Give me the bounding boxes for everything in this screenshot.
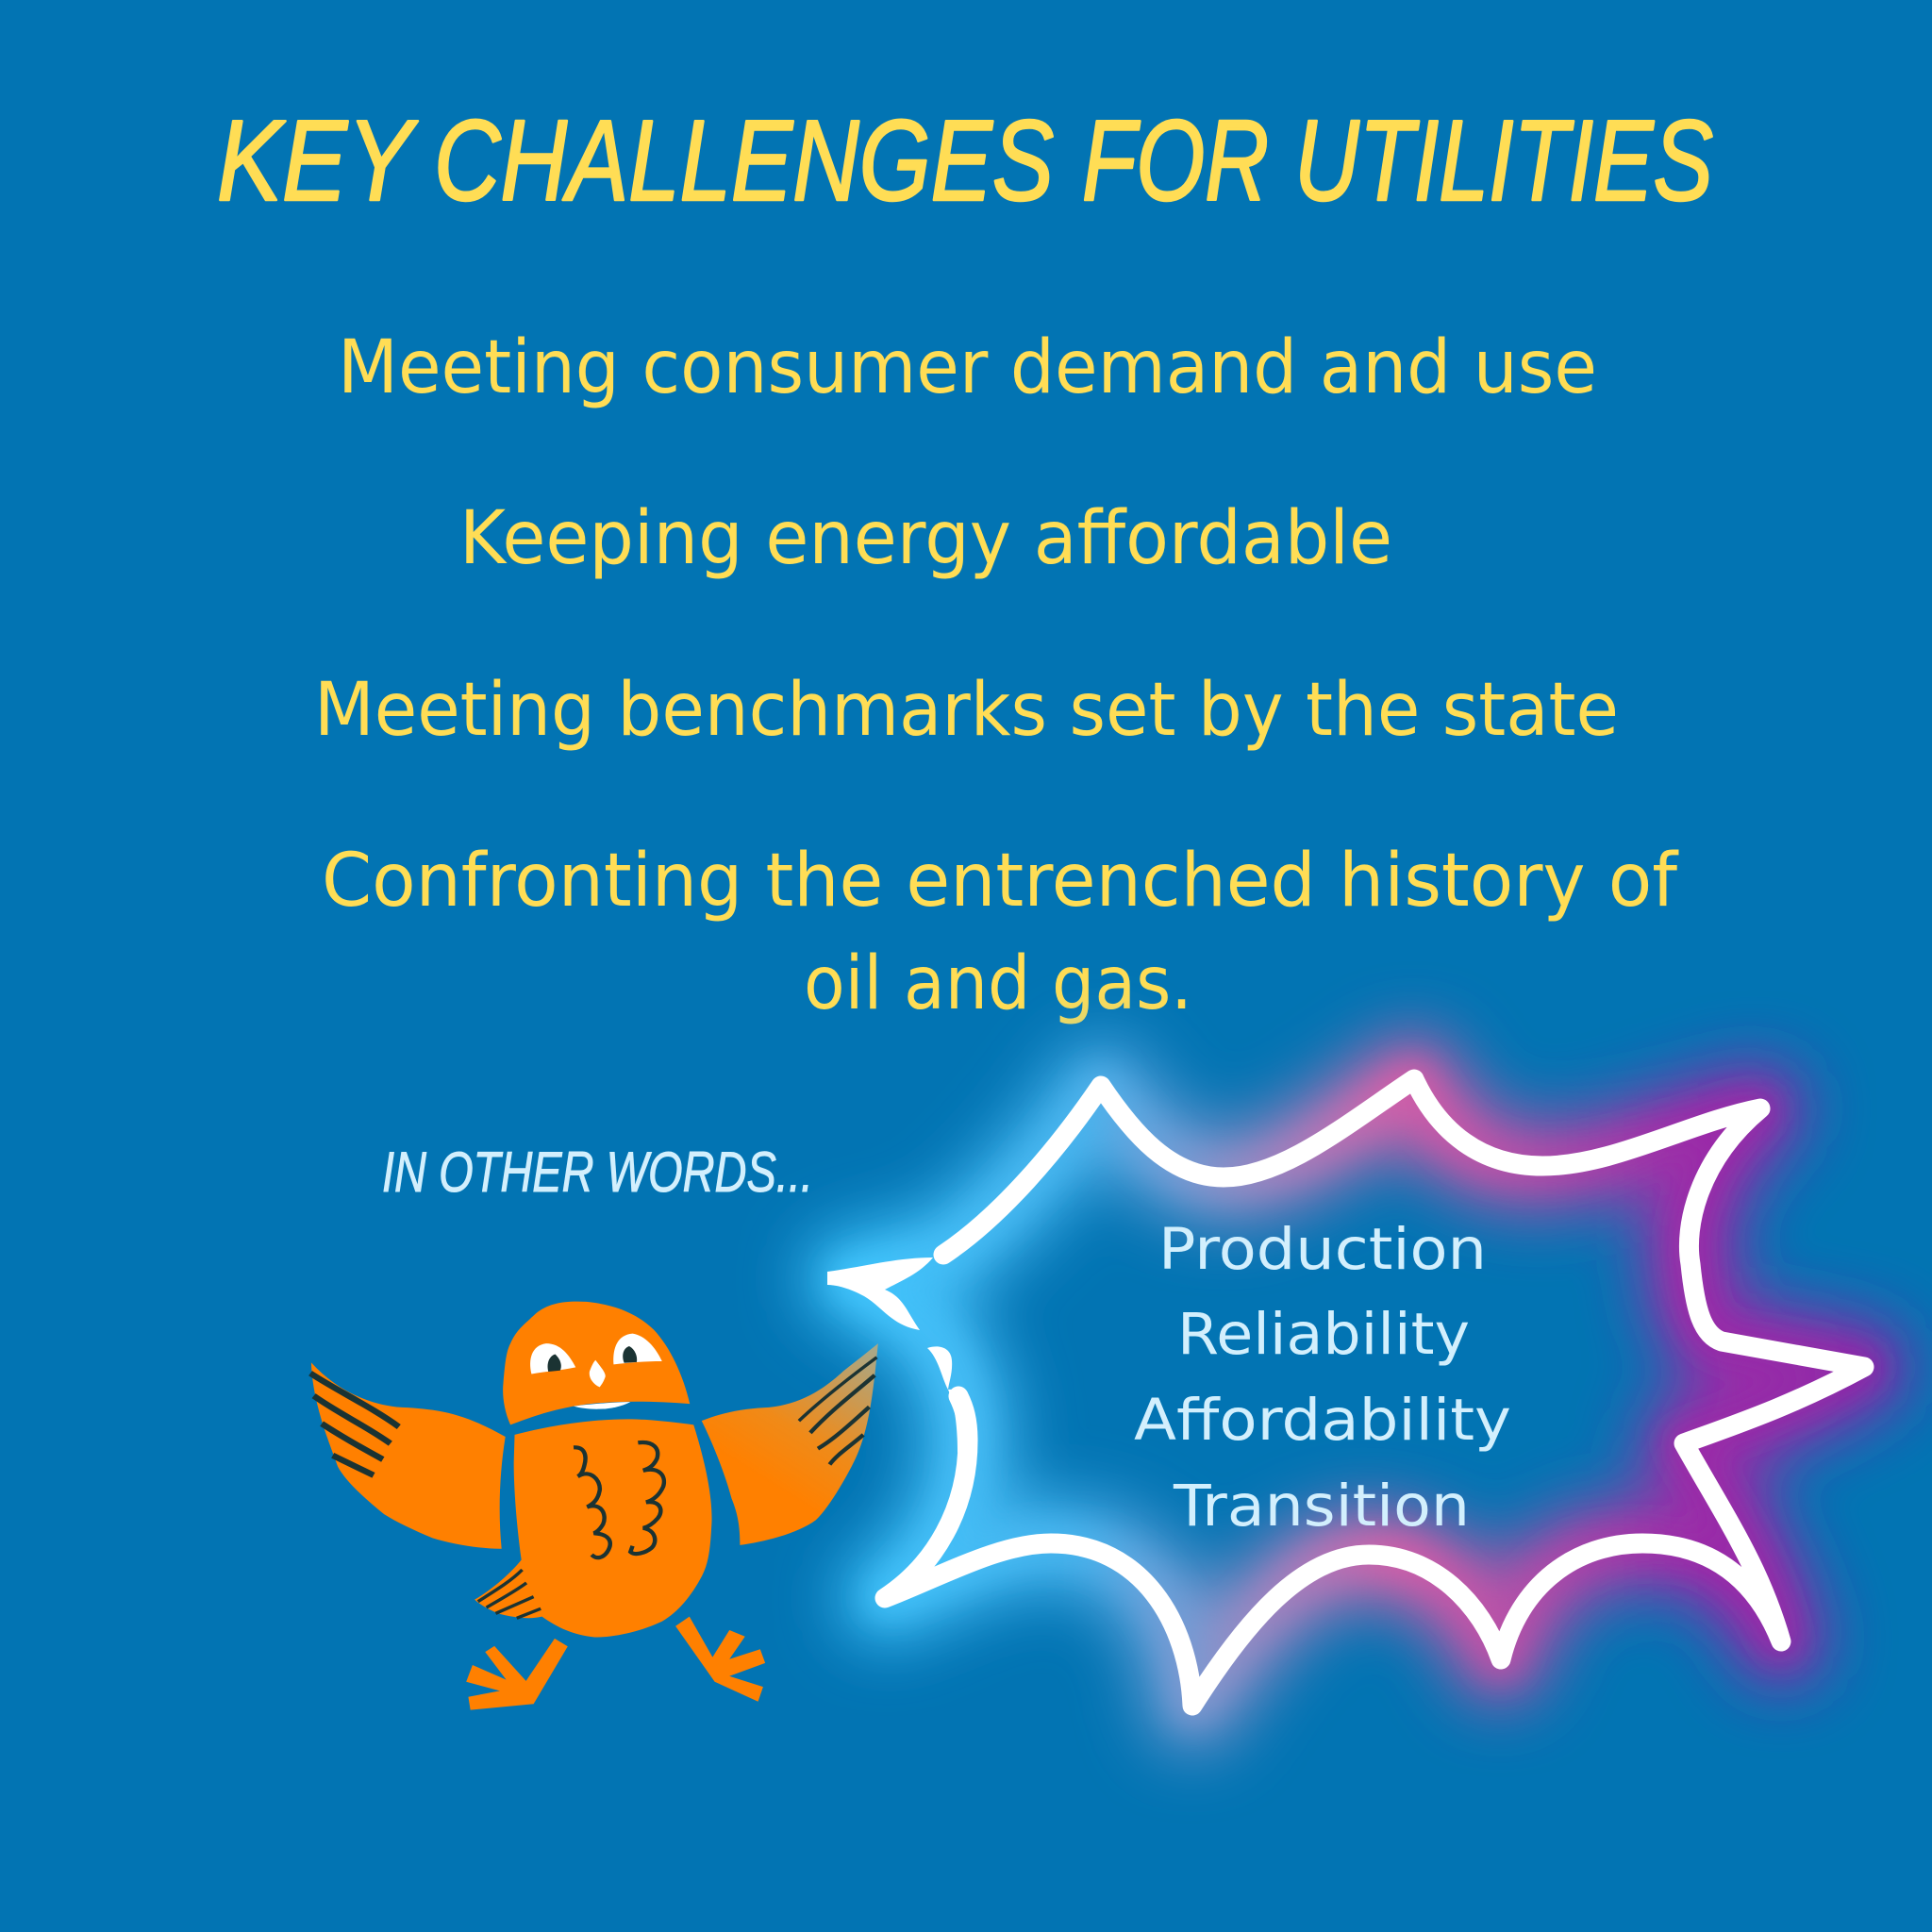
title word: KEY: KEY [217,96,418,225]
speech burst [827,1079,1864,1706]
word: affordability: Affordability [1134,1387,1511,1454]
word: transition: Transition [1173,1473,1470,1540]
owl chin [574,1402,630,1409]
challenge: oil and gas history, second line: oil and gas. [804,941,1192,1026]
caption: in other words: IN OTHER WORDS... [382,1141,813,1204]
challenge: demand: Meeting consumer demand and use [338,325,1597,410]
owl eyes and beak [530,1334,662,1387]
owl body [475,1419,712,1638]
burst outline [885,1079,1864,1706]
burst glow [849,1079,1864,1706]
owl feather stripes [310,1357,876,1618]
owl right foot [675,1617,765,1702]
owl right wing [702,1343,878,1545]
word: reliability: Reliability [1177,1301,1470,1368]
challenge: oil and gas history: Confronting the entrenched history of [322,839,1678,924]
word: production: Production [1158,1216,1487,1283]
title word: FOR: FOR [1082,96,1269,225]
burst tail piece [827,1257,933,1330]
owl left foot [466,1639,568,1710]
owl head [503,1302,690,1424]
owl left wing [311,1362,506,1549]
challenge: benchmarks: Meeting benchmarks set by the state [314,668,1619,753]
title [217,96,1713,225]
burst text [1134,1216,1511,1540]
burst broken edge [927,1346,976,1453]
challenge list [314,325,1678,1026]
title word: CHALLENGES: CHALLENGES [434,96,1054,225]
icon: orange owl [310,1302,878,1710]
challenge: affordability: Keeping energy affordable [459,496,1392,581]
title word: UTILITIES: UTILITIES [1294,96,1713,225]
